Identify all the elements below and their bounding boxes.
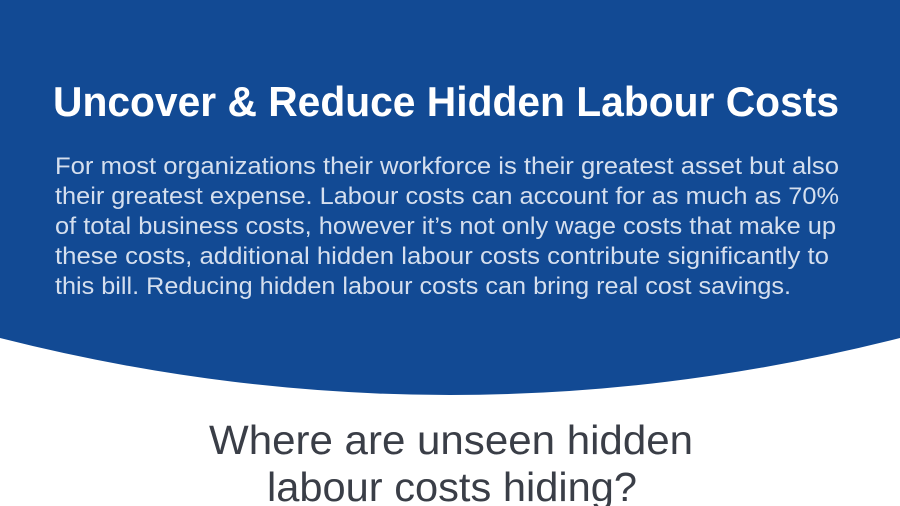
- section heading: Where are unseen hidden: [209, 417, 693, 463]
- intro paragraph: For most organizations their workforce is their greatest asset but also: [55, 153, 839, 180]
- intro paragraph: their greatest expense. Labour costs can account for as much as 70%: [55, 183, 839, 210]
- intro paragraph: [55, 153, 839, 300]
- header banner: [0, 0, 900, 395]
- intro paragraph: of total business costs, however it’s not only wage costs that make up: [55, 213, 836, 240]
- intro paragraph: this bill. Reducing hidden labour costs can bring real cost savings.: [55, 273, 791, 300]
- intro paragraph: these costs, additional hidden labour costs contribute significantly to: [55, 243, 829, 270]
- section heading: [209, 417, 693, 506]
- title: Uncover & Reduce Hidden Labour Costs: [53, 78, 839, 125]
